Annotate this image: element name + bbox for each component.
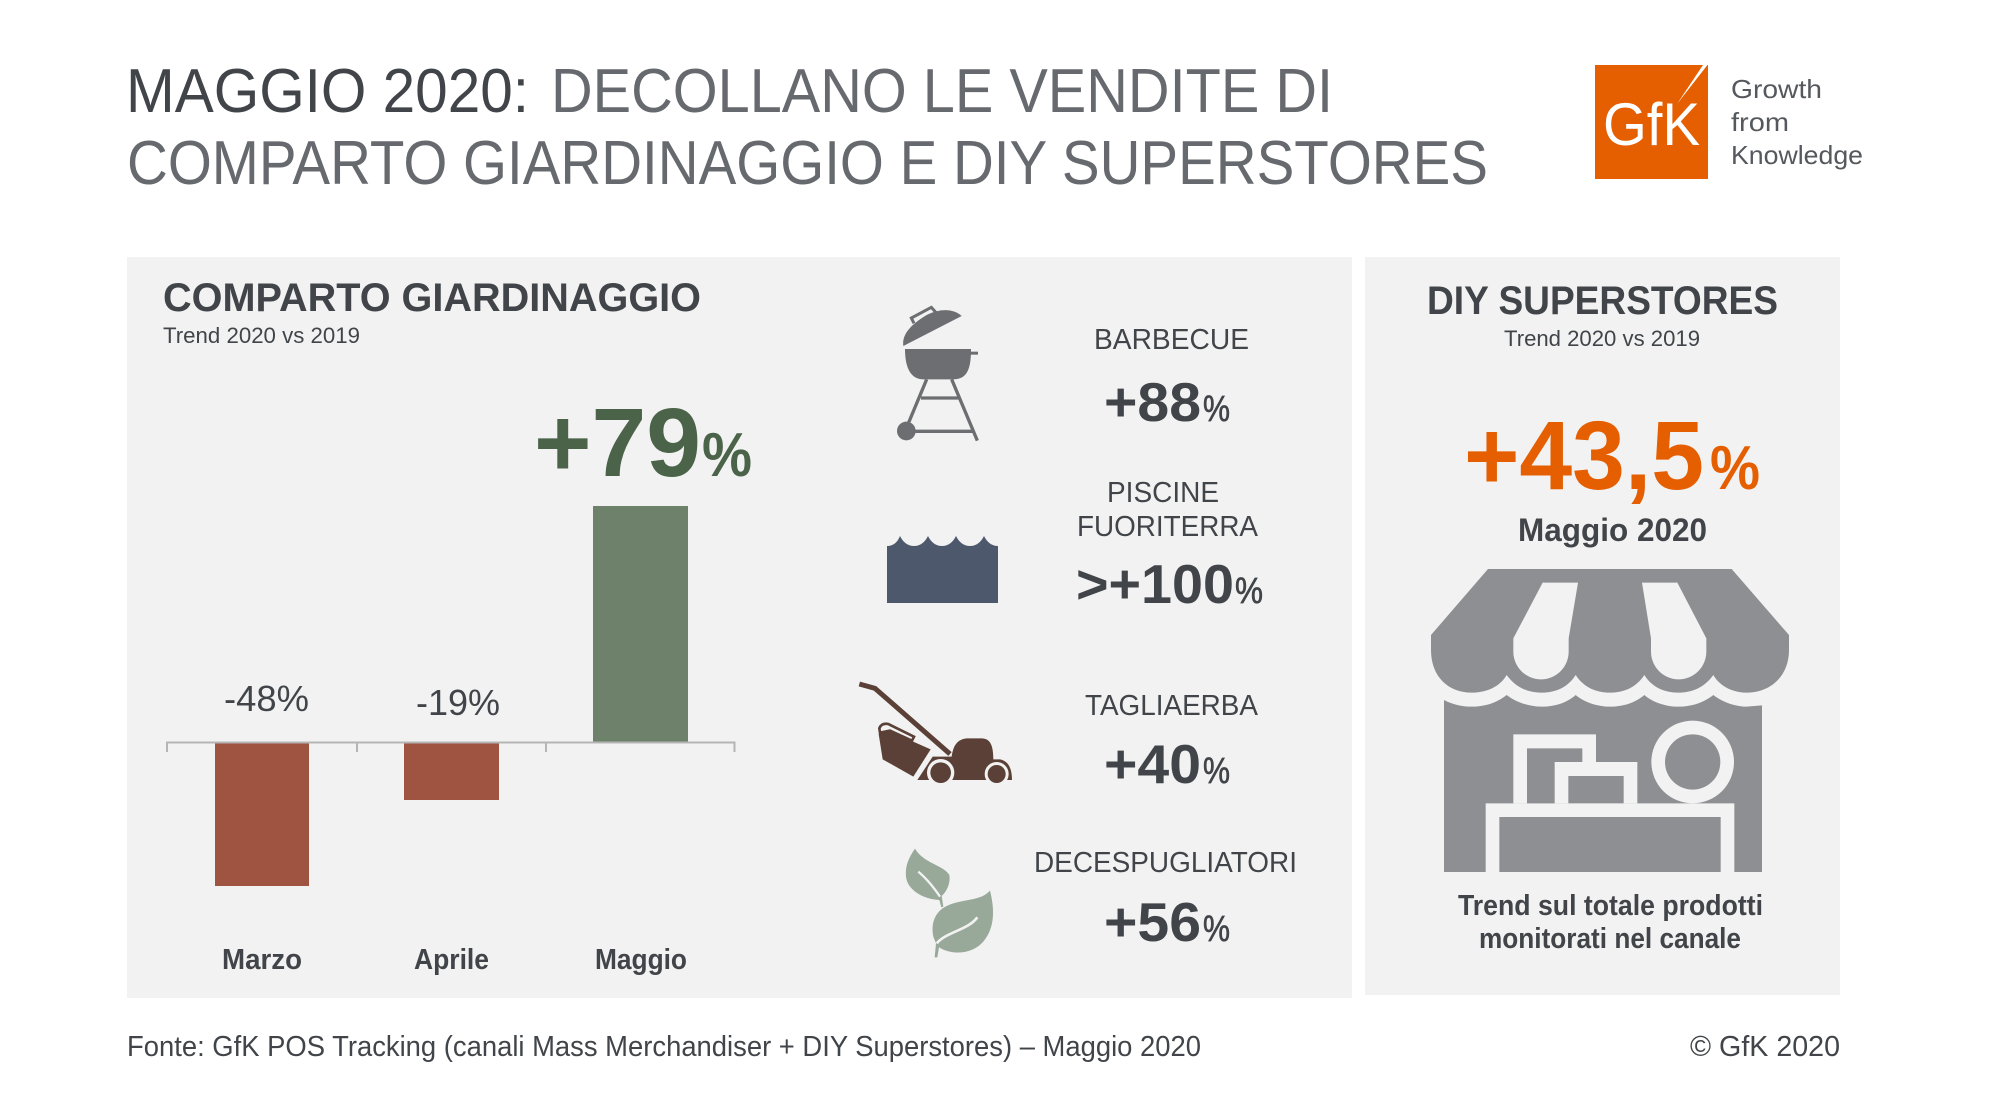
piscine label: PISCINE <box>1107 477 1219 509</box>
panel subtitle: Trend 2020 vs 2019 <box>1504 326 1700 351</box>
bar chart: Maggio <box>595 944 687 976</box>
barbecue value: +88 <box>1104 371 1201 433</box>
bar chart <box>167 388 752 976</box>
decespugliatori label: DECESPUGLIATORI <box>1034 847 1297 879</box>
title: COMPARTO GIARDINAGGIO E DIY SUPERSTORES <box>127 129 1488 198</box>
title: DECOLLANO LE VENDITE DI <box>551 57 1333 126</box>
icon: barbecue <box>897 307 978 441</box>
panel: comparto giardinaggio <box>127 257 1352 998</box>
tagliaerba value: +40 <box>1104 733 1201 795</box>
panel subtitle: Trend 2020 vs 2019 <box>163 323 360 348</box>
GfK logo: Growth <box>1731 74 1822 104</box>
bar chart: -48% <box>224 678 309 719</box>
GfK logo: from <box>1731 107 1789 137</box>
GfK logo: GfK <box>1603 91 1700 158</box>
bar chart: +79 <box>534 388 701 497</box>
decespugliatori value: +56 <box>1104 891 1201 953</box>
icon: lawn mower <box>859 684 1012 786</box>
decespugliatori value: % <box>1203 908 1230 949</box>
panel heading: COMPARTO GIARDINAGGIO <box>163 276 701 320</box>
panel: diy superstores <box>1365 257 1840 995</box>
store caption <box>1458 890 1763 955</box>
source note: Fonte: GfK POS Tracking (canali Mass Merchandiser + DIY Superstores) – Maggio 2020 <box>127 1031 1201 1063</box>
GfK logo <box>1595 63 1863 179</box>
store caption: monitorati nel canale <box>1479 923 1741 955</box>
piscine value: >+100 <box>1076 553 1234 615</box>
GfK logo: Knowledge <box>1731 140 1863 170</box>
piscine value: % <box>1235 570 1263 611</box>
bar chart: Marzo <box>222 944 302 976</box>
piscine label <box>1077 477 1259 543</box>
main value: % <box>1710 434 1760 503</box>
bar chart: -19% <box>416 682 500 723</box>
store caption: Trend sul totale prodotti <box>1458 890 1763 922</box>
value caption: Maggio 2020 <box>1518 512 1707 548</box>
barbecue value: % <box>1203 388 1230 429</box>
tagliaerba value: % <box>1203 750 1230 791</box>
icon: store <box>1431 569 1789 872</box>
bar chart: % <box>702 421 752 490</box>
piscine label: FUORITERRA <box>1077 511 1259 543</box>
tagliaerba label: TAGLIAERBA <box>1085 690 1259 722</box>
panel heading: DIY SUPERSTORES <box>1427 279 1778 323</box>
copyright: © GfK 2020 <box>1690 1031 1840 1063</box>
title: MAGGIO 2020: <box>126 57 529 126</box>
main value: +43,5 <box>1464 401 1704 510</box>
barbecue label: BARBECUE <box>1094 324 1249 356</box>
icon: leaves <box>906 849 993 957</box>
title <box>126 57 1488 198</box>
icon: water <box>887 536 998 603</box>
bar chart: Aprile <box>414 944 489 976</box>
